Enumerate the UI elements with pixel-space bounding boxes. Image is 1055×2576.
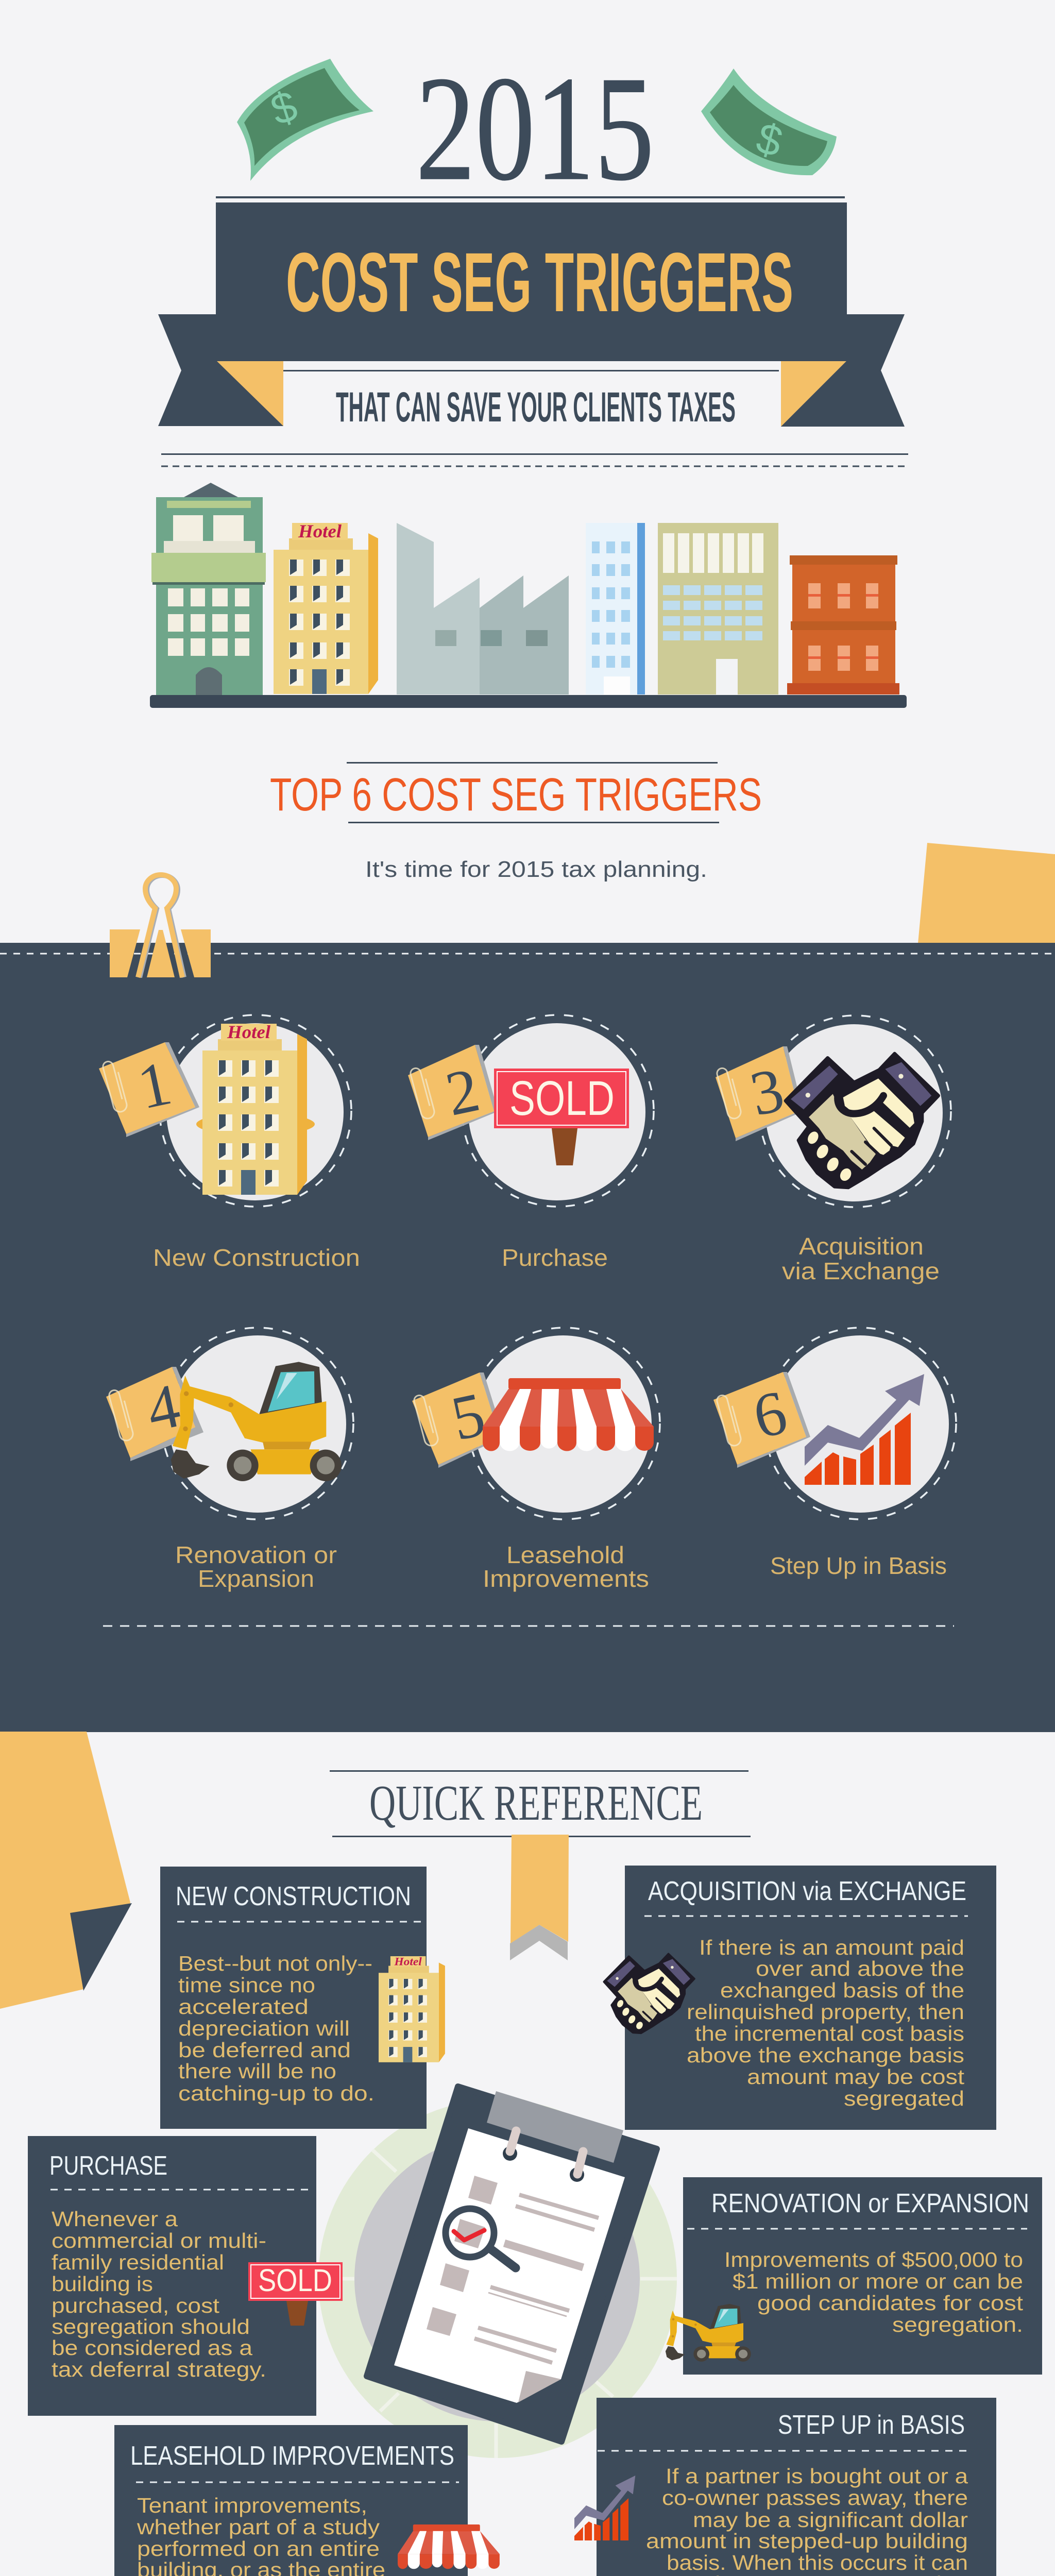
label: Leasehold [506,1541,624,1568]
illustration: clipboard checklist [367,2087,657,2442]
text block: segregation. [892,2313,1023,2336]
badge: number 2: 2 [440,1055,485,1129]
label: Renovation or [175,1541,337,1568]
illustration: right flying dollar bill: $ [752,113,788,166]
building: orange brick [787,555,899,694]
text block: be considered as a [52,2336,252,2360]
badge: number 6 [713,1372,806,1465]
panel: step up in basis [574,2398,996,2576]
trigger 1: new construction [99,1015,360,1271]
text block: Improvements of $500,000 to [724,2248,1023,2272]
icon: excavator [666,2304,751,2362]
title banner ribbon [158,202,905,427]
text block: purchased, cost [52,2294,220,2317]
panel: acquisition via exchange [604,1866,996,2130]
text block [724,2248,1024,2336]
label: via Exchange [782,1258,940,1284]
label: Acquisition [799,1233,924,1260]
text block: If there is an amount paid [699,1936,964,1959]
building: tan office [658,523,778,694]
text block: If a partner is bought out or a [666,2464,968,2488]
text block [178,1952,375,2105]
icon: hotel [379,1955,445,2062]
panel: leasehold improvements [114,2425,500,2576]
text block: relinquished property, then [687,2000,964,2024]
text block: basis. When this occurs it can [667,2551,968,2574]
trigger 6: step up in basis [713,1328,956,1579]
panel: new construction: NEW CONSTRUCTION [176,1882,411,1911]
badge: number 1: 1 [132,1048,177,1123]
text block: time since no [178,1973,315,1997]
text block [52,2207,266,2381]
text block: be deferred and [178,2038,351,2062]
text block: catching-up to do. [178,2081,375,2105]
illustration: city skyline [150,483,907,708]
badge: number 4: 4 [141,1370,186,1445]
text block: segregated [844,2087,964,2110]
icon: excavator [171,1362,342,1481]
ribbon fold: right [781,361,846,427]
text block: segregation should [52,2315,250,2338]
badge: number 1 [99,1042,195,1134]
text block: amount may be cost [747,2065,965,2089]
decorative sticky note: top right [918,843,1055,943]
panel: leasehold improvements: LEASEHOLD IMPROVEMENTS [130,2441,454,2471]
text block: Tenant improvements, [137,2494,367,2517]
text block: depreciation will [178,2016,350,2040]
badge: number 6: 6 [747,1377,793,1452]
badge: number 4 [106,1367,195,1458]
text block: commercial or multi- [52,2229,266,2252]
illustration: right flying dollar bill [701,69,837,175]
text block [137,2494,409,2576]
text block: family residential [52,2250,224,2274]
badge: number 3 [716,1046,799,1138]
text block: co-owner passes away, there [662,2486,968,2510]
badge: number 2 [408,1045,494,1137]
label: Purchase [502,1244,608,1271]
icon: handshake [786,1054,939,1188]
trigger 2: purchase [408,1015,654,1271]
building: factory [397,523,569,694]
building: blue tower [586,523,645,694]
badge: number 5 [412,1372,500,1465]
panel: acquisition via exchange: ACQUISITION via EXCHANGE [648,1876,966,1906]
label: New Construction [153,1244,360,1271]
text block [687,1936,965,2110]
decorative folded sticky note: left [0,1732,132,2009]
icon: magnifying glass with check [446,2209,516,2268]
panel: purchase: PURCHASE [49,2151,167,2181]
text block: Best--but not only-- [178,1952,372,1975]
ribbon fold: left [217,361,283,426]
trigger 5: leasehold improvements [412,1328,660,1592]
illustration: left flying dollar bill: $ [265,81,303,134]
icon: sold sign [494,1069,629,1165]
icon: hotel [202,1022,307,1195]
heading: quick reference: QUICK REFERENCE [369,1775,703,1831]
text block: above the exchange basis [687,2043,964,2067]
icon: sold sign: SOLD [509,1071,615,1126]
label: Step Up in Basis [770,1552,947,1579]
bookmark ribbon [510,1835,569,1960]
badge: number 3: 3 [744,1055,790,1129]
intro text: It's time for 2015 tax planning. [365,857,707,882]
text block: the incremental cost basis [695,2022,964,2045]
icon: storefront awning [483,1378,654,1451]
text block: accelerated [178,1995,309,2019]
text block: may be a significant dollar [693,2508,968,2532]
panel: renovation or expansion [683,2177,1042,2375]
title: 2015: 2015 [416,45,654,211]
label: Improvements [483,1565,649,1592]
text block: over and above the [756,1957,964,1980]
text block: $1 million or more or can be [733,2269,1023,2293]
heading: top 6 triggers: TOP 6 COST SEG TRIGGERS [270,769,762,821]
text block: tax deferral strategy. [52,2358,266,2381]
text block: good candidates for cost [757,2291,1024,2315]
text block: building is [52,2272,153,2296]
icon: rising chart [574,2476,635,2540]
building: green balcony building [151,483,266,695]
illustration: left flying dollar bill [237,59,373,181]
label [175,1541,337,1592]
text block: amount in stepped-up building [646,2529,968,2553]
icon: rising chart [805,1374,924,1485]
trigger 4: renovation or expansion [106,1328,353,1592]
badge: number 5: 5 [446,1379,491,1454]
text block: whether part of a study [137,2515,380,2539]
panel: purchase [28,2136,343,2416]
text block: performed on an entire [137,2537,380,2561]
building: hotel: Hotel [298,521,342,541]
building: hotel [274,521,378,694]
icon: sold sign: SOLD [258,2263,332,2298]
text block: Whenever a [52,2207,178,2231]
label [483,1541,649,1592]
label: Expansion [198,1565,314,1592]
text block: there will be no [178,2059,336,2083]
label [782,1233,940,1284]
ground strip [150,695,907,708]
icon: handshake [604,1954,694,2033]
text block: exchanged basis of the [720,1978,964,2002]
icon: sold sign [248,2262,343,2326]
icon: hotel: Hotel [227,1022,270,1042]
panel: top 6 triggers [0,943,1055,1732]
panel: step up in basis: STEP UP in BASIS [778,2410,965,2440]
illustration: binder clip [110,875,211,977]
trigger 3: acquisition via exchange [716,1015,951,1284]
icon: hotel: Hotel [394,1955,422,1968]
illustration: background dial [318,2099,677,2458]
icon: storefront awning [398,2524,500,2569]
text block [646,2464,968,2576]
panel: new construction [160,1867,445,2129]
